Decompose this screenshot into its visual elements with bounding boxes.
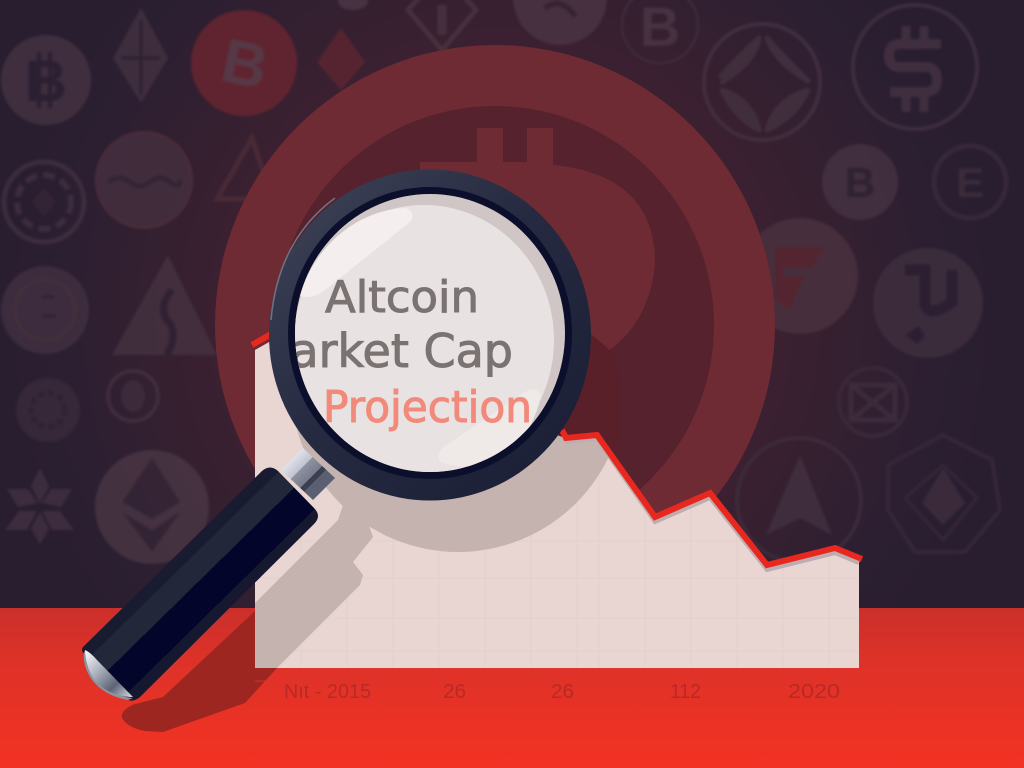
- icon: pound ring: [934, 146, 1006, 218]
- glass handle: [82, 468, 318, 701]
- red floor: [0, 608, 1024, 768]
- large red bitcoin ring: [215, 45, 775, 605]
- icon: red bitcoin coin: [191, 10, 297, 116]
- faded cryptocurrency icons: [1, 0, 1006, 564]
- chart line shadow: [565, 439, 859, 570]
- icon: red flag coin: [742, 218, 858, 334]
- icon: coin middle left: [1, 266, 89, 354]
- icon: arrow ring: [737, 438, 861, 562]
- icon: small bitcoin coin right: B: [845, 159, 875, 206]
- icon: pound ring: E: [956, 159, 984, 206]
- icon: top small mark: [338, 0, 368, 10]
- lens highlight lower: [468, 401, 540, 466]
- icon: outlined bitcoin top: [622, 0, 698, 63]
- lens inner ring: [288, 187, 572, 479]
- icon: solid triangle: [112, 255, 217, 355]
- dark background: [0, 0, 1024, 608]
- label: 26 first: 26: [443, 681, 466, 703]
- icon: small ring coin: [108, 371, 158, 421]
- handle metal cap: [84, 650, 133, 700]
- icon: dim coin: [16, 378, 80, 442]
- label: 112: 112: [670, 681, 701, 703]
- icon: bitcoin coin top left: [1, 35, 91, 125]
- axis ticks: [255, 668, 859, 681]
- glass ferrule: [281, 448, 335, 500]
- area chart: [250, 332, 864, 668]
- label: 26 second: 26: [551, 681, 574, 703]
- icon: ethereum kite: [113, 8, 168, 103]
- icon: shield coin: [873, 248, 983, 358]
- magnifying glass: [82, 170, 591, 701]
- icon: ethereum coin: [95, 450, 209, 564]
- chart red line: [252, 326, 862, 565]
- icon: envelope ring: [839, 368, 907, 436]
- handle metal end: [85, 650, 133, 697]
- icon: hexagon diamond ring: [888, 435, 1000, 552]
- icon: red bitcoin coin: B: [216, 26, 274, 103]
- lens title line 3: Projection: [323, 382, 532, 433]
- icon: wave coin: [96, 132, 192, 228]
- lens outer ring: [269, 170, 591, 500]
- icon: red diamond: [317, 28, 365, 90]
- chart grid: [255, 330, 859, 668]
- lens inner light area: [294, 205, 554, 475]
- chart area fill: [255, 333, 859, 668]
- bitcoin symbol behind lens: [420, 128, 655, 370]
- lens title line 2: Market Cap: [251, 324, 513, 378]
- icon: bitcoin coin top left: B: [25, 49, 67, 114]
- icon: top coin: [513, 0, 607, 45]
- lens glass: [295, 194, 565, 472]
- lens shadow on dark circle: [560, 333, 620, 445]
- axis labels: [284, 681, 840, 703]
- label: start year: Nıt - 2015: [284, 681, 371, 703]
- lens title line 1: Altcoin: [325, 272, 479, 323]
- icon: patterned coin left: [4, 162, 84, 242]
- icon: small bitcoin coin right: [822, 144, 898, 220]
- icon: dollar ring: [853, 5, 977, 129]
- icon: snowflake: [5, 468, 74, 544]
- icon: outlined triangle: [217, 138, 272, 199]
- handle shadow on floor: [122, 611, 277, 732]
- lens shadow on chart: [255, 428, 608, 668]
- icon: top diamond: [408, 0, 476, 50]
- lens highlight upper: [300, 208, 413, 297]
- icon: star ring: [704, 24, 820, 140]
- lens rim highlight: [271, 198, 335, 320]
- label: 2020: 2020: [788, 681, 840, 703]
